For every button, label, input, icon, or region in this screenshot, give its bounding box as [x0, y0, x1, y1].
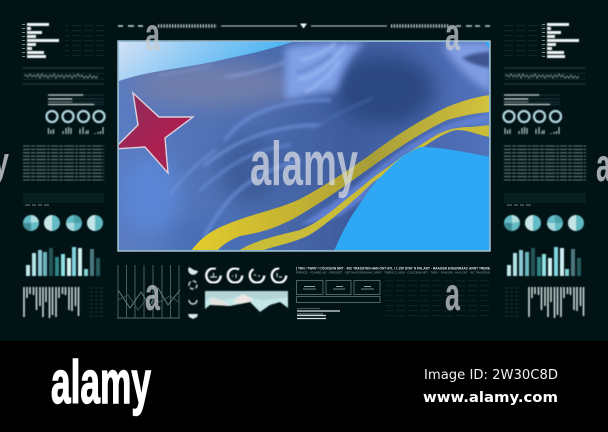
- sky top left: [119, 41, 296, 81]
- flag shading and folds: [120, 55, 435, 253]
- ring gauges: [504, 111, 561, 122]
- right dim table strip: [504, 193, 586, 205]
- panel: left progress and rings: [46, 95, 104, 134]
- panel: left column top bars: [22, 23, 104, 59]
- info boxes: [296, 280, 380, 302]
- flag band beneath the stripe: [300, 113, 490, 225]
- right hanging bars labels: [505, 288, 520, 316]
- right text block: [504, 146, 586, 180]
- watermark: bottom left a: a: [145, 268, 160, 320]
- footer: black stock credit band: [0, 341, 608, 432]
- small data caption text: ( TRN / TWRY / COOCENN NRT · INC TRASSTAN HAN ONT ATL / 1 250 STAT N PALANT · RAAGSR EVEENNAAC ARNT TRERE: [296, 266, 490, 270]
- progress bars: [48, 95, 104, 104]
- watermark: top right a: a: [445, 8, 460, 60]
- footer image id: Image ID: 2W30C8D: [424, 367, 558, 383]
- flag upper light fold: [285, 42, 492, 100]
- area chart: [205, 291, 288, 312]
- panel: dark HUD background: [0, 0, 608, 341]
- watermark: top left a: a: [145, 8, 160, 60]
- four ring dials: [206, 268, 286, 283]
- horizontal white bars: [547, 23, 579, 58]
- small status icons: [188, 267, 198, 319]
- mini bars: [48, 127, 103, 134]
- progress bars: [504, 95, 560, 104]
- flag upper yellow stripe: [191, 95, 490, 251]
- left hanging bars labels: [90, 288, 103, 316]
- ring gauges: [46, 111, 104, 122]
- right hanging bars: [529, 287, 584, 318]
- watermark: bottom right a: a: [445, 268, 460, 320]
- line chart with grid: [117, 265, 180, 318]
- left text block: [23, 146, 104, 180]
- small data caption text: [296, 266, 490, 274]
- dim dotted data grid: [385, 278, 490, 320]
- panel: waving Aruba flag: [114, 41, 492, 253]
- left dim table strip: [23, 193, 104, 205]
- sky bottom right: [334, 147, 490, 251]
- watermark: center alamy: alamy: [250, 130, 358, 199]
- panel: right column top bars: [504, 23, 579, 59]
- panel: right waveform strip: [504, 68, 585, 84]
- right bar chart: [507, 247, 581, 276]
- flag red star: [114, 93, 193, 173]
- left pie charts: [23, 215, 103, 231]
- mini bars: [505, 127, 559, 134]
- left bar chart: [26, 247, 100, 276]
- left hanging bars: [24, 287, 78, 318]
- panel: right progress and rings: [504, 95, 561, 134]
- right pie charts: [504, 215, 584, 231]
- footer url: www.alamy.com: [423, 390, 558, 406]
- small data caption text: PRENCE · FCHASE INC · PRESSET · CEPTAN EVEENNAAC ARNT · TRERE CLASSA · COOCENN NRT · TWRY · RAAGSR · HAN ONT · INC TRASSTAN: [296, 270, 490, 274]
- flag lower yellow stripe: [238, 125, 490, 251]
- flag cloth: [119, 42, 490, 251]
- panel: left waveform strip: [23, 68, 104, 84]
- horizontal white bars: [27, 23, 59, 58]
- top decorative header strip: [118, 24, 490, 28]
- footer logo: alamy: alamy: [51, 349, 151, 416]
- small summary lines: [297, 308, 340, 318]
